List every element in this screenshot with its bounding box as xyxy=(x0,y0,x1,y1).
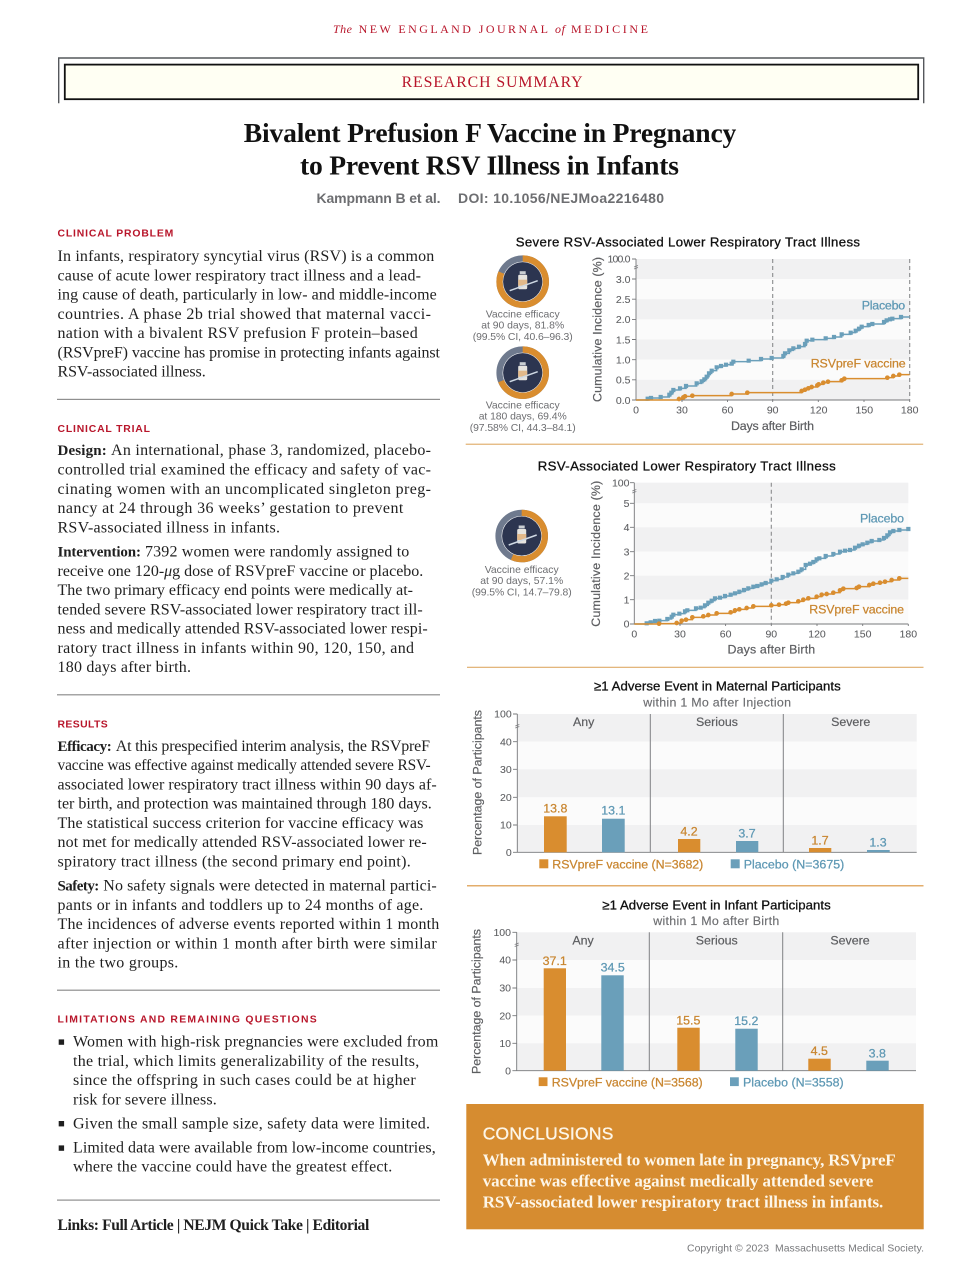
panel: infant adverse events xyxy=(470,897,916,1089)
text block: safety: after injection or within 1 month after birth were similar xyxy=(58,936,437,952)
legend: Placebo (N=3675) xyxy=(744,857,844,871)
caption: efficacy at 180 days xyxy=(470,400,576,434)
x axis labels: 60 xyxy=(720,628,732,640)
y axis labels: 3.0 xyxy=(616,274,631,286)
x axis labels: 90 xyxy=(765,628,777,640)
caption: efficacy at 90 days: at 90 days, 81.8% xyxy=(481,321,564,332)
series label: placebo: Placebo xyxy=(860,512,904,526)
text block: efficacy: The statistical success criterion for vaccine efficacy was xyxy=(58,815,423,832)
text block: efficacy: vaccine was effective against medically attended severe RSV- xyxy=(58,757,431,774)
text block: intervention: ness and medically attended RSV-associated lower respi- xyxy=(58,620,428,638)
title: Bivalent Prefusion F Vaccine in Pregnancy xyxy=(244,117,737,148)
text block: efficacy: ter birth, and protection was maintained through 180 days. xyxy=(58,796,432,812)
text block: safety: No safety signals were detected in maternal partici- xyxy=(103,878,437,895)
y axis labels: 2.5 xyxy=(616,294,631,306)
caption: efficacy at 90 days: (99.5% CI, 14.7–79.8) xyxy=(472,587,572,598)
icon: efficacy donut 57.1 xyxy=(498,513,545,559)
y axis labels: 20 xyxy=(499,1010,511,1022)
text block: design: cinating women with an uncomplicated singleton preg- xyxy=(58,481,431,498)
y axis labels: 1 xyxy=(624,594,630,606)
text block: design: controlled trial examined the efficacy and safety of vac- xyxy=(58,461,431,478)
text block: clinical problem: ing cause of death, particularly in low- and middle-income xyxy=(58,286,437,304)
line chart: severe RSV incidence xyxy=(591,254,919,433)
x axis labels: 30 xyxy=(676,404,688,416)
text block: safety xyxy=(58,878,439,972)
line chart: RSV incidence xyxy=(589,477,917,656)
bullet list: limitations: Limited data were available from low-income countries, xyxy=(73,1140,436,1157)
panel: limitations and remaining questions xyxy=(58,1015,439,1176)
y axis labels: 1.5 xyxy=(616,334,631,346)
y axis labels: 10 xyxy=(499,1038,511,1050)
caption: efficacy at 180 days: (97.58% CI, 44.3–84.1) xyxy=(470,423,576,434)
text block: design: An international, phase 3, randomized, placebo- xyxy=(111,442,431,459)
bar chart: maternal xyxy=(513,714,917,852)
text block: efficacy: spiratory tract illness (the second primary end point). xyxy=(58,854,411,870)
x axis labels: 90 xyxy=(767,404,779,416)
legend xyxy=(539,1075,844,1089)
panel: clinical trial xyxy=(58,424,431,676)
caption: efficacy at 90 days: Vaccine efficacy xyxy=(486,310,560,320)
authors and DOI xyxy=(316,190,664,206)
caption: efficacy at 90 days xyxy=(473,310,573,343)
bar values xyxy=(543,802,887,850)
caption: efficacy at 90 days xyxy=(472,565,572,598)
journal masthead: The xyxy=(333,22,353,36)
journal masthead: MEDICINE xyxy=(571,22,648,36)
legend xyxy=(539,857,844,871)
text block: design: RSV-associated illness in infants. xyxy=(58,520,280,536)
y axis labels: 100 xyxy=(612,477,630,489)
y axis title: Cumulative Incidence (%) xyxy=(591,257,605,402)
research summary banner xyxy=(59,58,924,103)
category labels xyxy=(572,933,870,947)
caption: efficacy at 90 days: at 90 days, 57.1% xyxy=(480,576,563,587)
x axis labels: 0 xyxy=(631,628,637,640)
text block: efficacy: Efficacy: xyxy=(58,739,112,755)
bullet list: limitations: since the offspring in such cases could be at higher xyxy=(73,1072,416,1089)
text block: intervention: 180 days after birth. xyxy=(58,659,191,676)
y axis labels: 30 xyxy=(500,764,512,776)
text block: intervention: Intervention: xyxy=(58,545,141,561)
text block: safety: Safety: xyxy=(58,879,99,895)
text block: clinical problem: countries. A phase 2b trial showed that maternal vacci- xyxy=(58,306,431,323)
text block: safety: The incidences of adverse events reported within 1 month xyxy=(58,916,439,933)
y axis labels: 5 xyxy=(624,498,630,510)
bullet list: limitations: risk for severe illness. xyxy=(73,1092,217,1108)
y axis title: Percentage of Participants xyxy=(471,710,485,855)
bar values: 4.5 xyxy=(811,1044,828,1058)
category labels: Serious xyxy=(696,715,738,729)
y axis title: Cumulative Incidence (%) xyxy=(589,481,603,627)
x axis labels: 180 xyxy=(900,628,917,640)
y axis labels: 100 xyxy=(493,927,511,939)
bar values: 1.3 xyxy=(869,836,887,850)
y axis labels: 10 xyxy=(500,820,512,832)
heading: clinical trial: CLINICAL TRIAL xyxy=(58,424,151,435)
bar values xyxy=(543,954,886,1060)
y axis labels: 0.5 xyxy=(616,375,631,387)
category labels: Severe xyxy=(830,933,870,947)
category labels xyxy=(573,715,870,729)
authors and DOI: Kampmann B et al. xyxy=(316,190,440,206)
heading: clinical problem: CLINICAL PROBLEM xyxy=(58,229,173,240)
bar values: 13.1 xyxy=(601,804,625,818)
x axis labels: 0 xyxy=(633,404,639,416)
category labels: Any xyxy=(573,715,595,729)
x axis title: Days after Birth xyxy=(731,419,814,433)
copyright: Copyright © 2023 Massachusetts Medical Society. xyxy=(687,1244,924,1255)
bar values: 4.2 xyxy=(680,825,698,839)
y axis title: Percentage of Participants xyxy=(470,929,484,1074)
y axis labels xyxy=(494,709,512,859)
bullet list: limitations: the trial, which limits generalizability of the results, xyxy=(73,1053,419,1070)
y axis labels xyxy=(493,927,511,1077)
bar values: 13.8 xyxy=(543,802,567,816)
legend: Placebo (N=3558) xyxy=(743,1075,844,1089)
y axis labels: 40 xyxy=(500,736,512,748)
category labels: Severe xyxy=(831,715,870,729)
text block: conclusions: When administered to women late in pregnancy, RSVpreF xyxy=(483,1151,896,1170)
series label: placebo: Placebo xyxy=(862,298,905,312)
text block: efficacy xyxy=(58,738,437,870)
chart subtitle: within 1 Mo after Injection xyxy=(642,696,791,710)
links: Links: Full Article | NEJM Quick Take | Editorial xyxy=(58,1217,370,1234)
heading: conclusions: CONCLUSIONS xyxy=(483,1123,613,1143)
x axis labels: 120 xyxy=(810,404,828,416)
text block: conclusions xyxy=(483,1151,896,1212)
bar chart: infant xyxy=(512,932,916,1071)
text block: clinical problem: cause of acute lower respiratory tract illness and a lead- xyxy=(58,267,421,284)
y axis labels: 2.0 xyxy=(616,314,631,326)
text block: clinical problem xyxy=(58,248,441,381)
series label: vaccine: RSVpreF vaccine xyxy=(809,602,904,616)
text block: clinical problem: nation with a bivalent RSV prefusion F protein–based xyxy=(58,325,418,342)
research summary banner: RESEARCH SUMMARY xyxy=(402,74,583,91)
caption: efficacy at 180 days: Vaccine efficacy xyxy=(486,400,560,412)
text block: intervention: ratory tract illness in infants within 90, 120, 150, and xyxy=(58,640,414,657)
journal masthead: NEW ENGLAND JOURNAL xyxy=(359,22,548,36)
y axis labels: 4 xyxy=(624,522,630,534)
x axis labels: 150 xyxy=(854,628,872,640)
series label: vaccine: RSVpreF vaccine xyxy=(811,357,906,371)
x axis labels xyxy=(633,404,919,416)
chart subtitle: within 1 Mo after Birth xyxy=(652,914,779,928)
text block: design: nancy at 24 through 36 weeks’ gestation to prevent xyxy=(58,500,404,517)
panel: RSV chart xyxy=(472,459,917,656)
icon: efficacy donut 81.8 xyxy=(500,258,546,305)
heading: results: RESULTS xyxy=(58,720,108,731)
category labels: Any xyxy=(572,933,594,947)
journal masthead xyxy=(333,22,648,36)
text block: conclusions: vaccine was effective against medically attended severe xyxy=(483,1172,874,1191)
journal masthead: of xyxy=(555,22,567,36)
chart title: ≥1 Adverse Event in Maternal Participants xyxy=(594,679,841,694)
text block: design xyxy=(58,442,431,536)
y axis labels: 40 xyxy=(499,955,511,967)
bar values: 15.5 xyxy=(676,1013,700,1027)
chart title: RSV-Associated Lower Respiratory Tract Illness xyxy=(538,459,836,474)
text block: efficacy: At this prespecified interim analysis, the RSVpreF xyxy=(116,738,430,755)
y axis labels: 0 xyxy=(505,1065,511,1077)
panel: results xyxy=(58,720,439,972)
bullet list: limitations: Given the small sample size, safety data were limited. xyxy=(73,1115,430,1132)
bar values: 15.2 xyxy=(734,1014,758,1028)
text block: safety: in the two groups. xyxy=(58,954,178,972)
y axis labels: 2 xyxy=(624,570,630,582)
y axis labels xyxy=(608,254,631,407)
text block: efficacy: associated lower respiratory tract illness within 90 days af- xyxy=(58,776,437,794)
bar values: 34.5 xyxy=(601,961,625,975)
y axis labels: 1.0 xyxy=(616,354,631,366)
y axis labels xyxy=(612,477,630,631)
text block: efficacy: not met for medically attended RSV-associated lower re- xyxy=(58,834,427,851)
y axis labels: 0.0 xyxy=(616,395,631,407)
bullet list: limitations xyxy=(59,1034,439,1176)
legend: RSVpreF vaccine (N=3568) xyxy=(552,1075,703,1089)
text block: intervention: 7392 women were randomly assigned to xyxy=(145,544,409,561)
caption: efficacy at 90 days: Vaccine efficacy xyxy=(485,565,559,576)
bar values: 3.8 xyxy=(869,1046,886,1060)
text block: intervention xyxy=(58,544,428,676)
panel: conclusions xyxy=(466,1104,924,1229)
category labels: Serious xyxy=(696,933,738,947)
x axis title: Days after Birth xyxy=(728,642,815,656)
panel: maternal adverse events xyxy=(471,679,917,871)
text block: clinical problem: (RSVpreF) vaccine has promise in protecting infants against xyxy=(58,344,441,361)
x axis labels: 150 xyxy=(856,404,873,416)
y axis labels: 30 xyxy=(499,983,511,995)
panel: clinical problem xyxy=(58,229,441,381)
authors and DOI: DOI: 10.1056/NEJMoa2216480 xyxy=(458,190,664,206)
panel: severe RSV chart xyxy=(470,235,919,434)
bullet list: limitations: where the vaccine could have the greatest effect. xyxy=(73,1159,392,1176)
icon: efficacy donut 69.4 xyxy=(500,350,546,396)
text block: safety: pants or in infants and toddlers up to 24 months of age. xyxy=(58,897,423,914)
bar values: 37.1 xyxy=(543,954,567,968)
y axis labels: 100.0 xyxy=(608,254,631,266)
title: to Prevent RSV Illness in Infants xyxy=(300,149,679,180)
y axis labels: 3 xyxy=(624,546,630,558)
y axis labels: 0 xyxy=(624,619,630,631)
title xyxy=(244,117,737,180)
x axis labels: 180 xyxy=(901,404,919,416)
chart title: Severe RSV-Associated Lower Respiratory Tract Illness xyxy=(516,235,860,250)
y axis labels: 20 xyxy=(500,792,512,804)
text block: clinical problem: RSV-associated illness. xyxy=(58,364,206,381)
bar values: 3.7 xyxy=(738,827,756,841)
x axis labels: 60 xyxy=(722,404,733,416)
text block: intervention: The two primary efficacy end points were medically at- xyxy=(58,582,413,599)
caption: efficacy at 180 days: at 180 days, 69.4% xyxy=(479,412,567,423)
y axis labels: 100 xyxy=(494,709,512,721)
heading: limitations: LIMITATIONS AND REMAINING QUESTIONS xyxy=(58,1015,317,1026)
chart title: ≥1 Adverse Event in Infant Participants xyxy=(602,897,831,912)
text block: intervention: receive one 120-μg dose of RSVpreF vaccine or placebo. xyxy=(58,563,423,580)
text block: intervention: tended severe RSV-associated lower respiratory tract ill- xyxy=(58,601,423,618)
bullet list: limitations: Women with high-risk pregnancies were excluded from xyxy=(73,1034,439,1051)
legend: RSVpreF vaccine (N=3682) xyxy=(552,857,703,871)
text block: clinical problem: In infants, respiratory syncytial virus (RSV) is a common xyxy=(58,248,434,265)
x axis labels: 30 xyxy=(674,628,686,640)
text block: conclusions: RSV-associated lower respiratory tract illness in infants. xyxy=(483,1193,883,1212)
x axis labels xyxy=(631,628,917,640)
x axis labels: 120 xyxy=(808,628,826,640)
bar values: 1.7 xyxy=(811,833,829,847)
caption: efficacy at 90 days: (99.5% CI, 40.6–96.3) xyxy=(473,332,573,343)
y axis labels: 0 xyxy=(506,847,512,859)
text block: design: Design: xyxy=(58,443,107,459)
